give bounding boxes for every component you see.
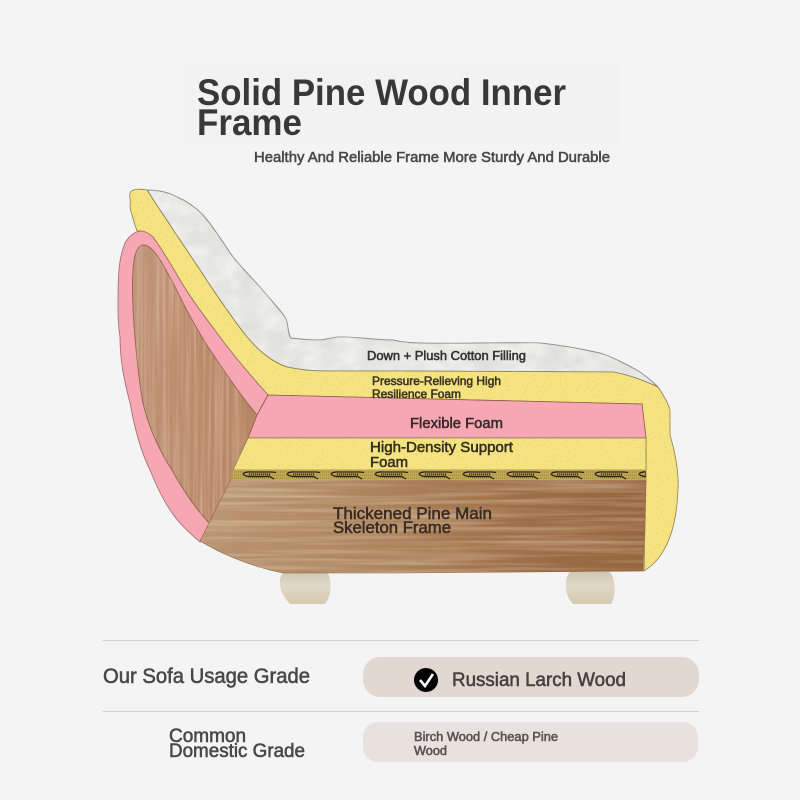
pill: birch wood or cheap pine wood bbox=[363, 722, 698, 762]
icon: check mark bbox=[414, 668, 438, 692]
title: Solid Pine Wood Inner bbox=[197, 72, 566, 113]
row heading: common domestic grade bbox=[169, 726, 305, 762]
layer: outer pink shell bbox=[118, 231, 268, 542]
label: high-density support foam: High-Density Support bbox=[370, 439, 514, 456]
label: pressure-relieving foam: Resilience Foam bbox=[372, 387, 461, 401]
sofa cross-section diagram bbox=[118, 189, 678, 604]
foot: right bbox=[566, 572, 615, 604]
row heading: common domestic grade: Common bbox=[169, 726, 246, 747]
subtitle: Healthy And Reliable Frame More Sturdy And Durable bbox=[254, 150, 610, 166]
label: flexible foam: Flexible Foam bbox=[410, 415, 503, 432]
foot: left bbox=[280, 572, 331, 604]
title bbox=[183, 66, 619, 144]
label: pine skeleton frame bbox=[333, 505, 492, 537]
layer: thickened pine main skeleton frame bbox=[200, 479, 646, 573]
row heading: our sofa usage grade: Our Sofa Usage Grade bbox=[103, 665, 310, 688]
label: high-density support foam: Foam bbox=[370, 454, 408, 471]
layer: flexible foam bbox=[248, 395, 646, 438]
title: Frame bbox=[197, 102, 302, 143]
layer: high-density support foam bbox=[233, 438, 646, 470]
layer: down and plush cotton filling bbox=[147, 190, 658, 387]
label: pressure-relieving foam: Pressure-Relieving High bbox=[372, 374, 501, 388]
layer: pressure-relieving high resilience foam bbox=[130, 189, 678, 571]
label: down and plush cotton filling: Down + Plush Cotton Filling bbox=[367, 349, 526, 363]
pill: birch wood or cheap pine wood: Birch Wood / Cheap Pine bbox=[414, 730, 558, 744]
label: pine skeleton frame: Thickened Pine Main bbox=[333, 505, 492, 523]
row heading: common domestic grade: Domestic Grade bbox=[169, 741, 305, 762]
label: high-density support foam bbox=[370, 439, 514, 471]
label: pressure-relieving foam bbox=[372, 374, 501, 401]
layer: wooden back panel bbox=[133, 245, 257, 526]
pill: birch wood or cheap pine wood: Wood bbox=[414, 744, 447, 758]
layer: spring webbing strip bbox=[231, 470, 646, 480]
label: pine skeleton frame: Skeleton Frame bbox=[333, 519, 451, 537]
pill: russian larch wood bbox=[363, 657, 699, 697]
pill: russian larch wood: Russian Larch Wood bbox=[452, 670, 626, 691]
